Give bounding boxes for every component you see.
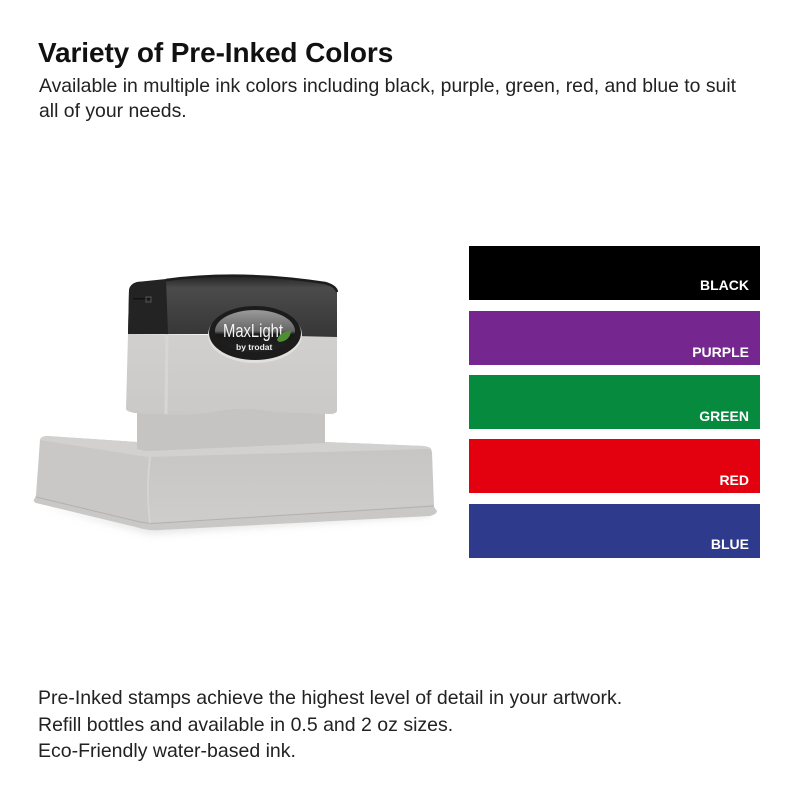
footer text: Refill bottles and available in 0.5 and 2 oz sizes. xyxy=(38,714,453,736)
title: Variety of Pre-Inked Colors xyxy=(38,37,393,68)
swatch: purple xyxy=(469,311,760,365)
intro text: Available in multiple ink colors including black, purple, green, red, and blue to suit xyxy=(39,74,736,96)
swatch: red: RED xyxy=(719,472,749,488)
swatch: blue xyxy=(469,504,760,558)
swatch: black: BLACK xyxy=(700,277,749,293)
swatch: green xyxy=(469,375,760,429)
footer text: Pre-Inked stamps achieve the highest level of detail in your artwork. xyxy=(38,687,622,709)
swatch: blue: BLUE xyxy=(711,536,749,552)
stamp handle xyxy=(126,276,337,415)
stamp neck xyxy=(137,405,325,451)
MaxLight trodat logo badge: MaxLight xyxy=(223,321,283,341)
footer text: Eco-Friendly water-based ink. xyxy=(38,740,296,762)
intro text: all of your needs. xyxy=(39,100,187,122)
swatch: green: GREEN xyxy=(699,408,749,424)
MaxLight trodat logo badge xyxy=(208,306,302,363)
swatch: black xyxy=(469,246,760,300)
swatch: purple: PURPLE xyxy=(692,344,749,360)
footer text xyxy=(38,687,622,762)
intro text xyxy=(39,74,736,122)
swatch: red xyxy=(469,439,760,493)
MaxLight trodat logo badge: by trodat xyxy=(236,342,273,352)
stamp base xyxy=(34,436,437,534)
